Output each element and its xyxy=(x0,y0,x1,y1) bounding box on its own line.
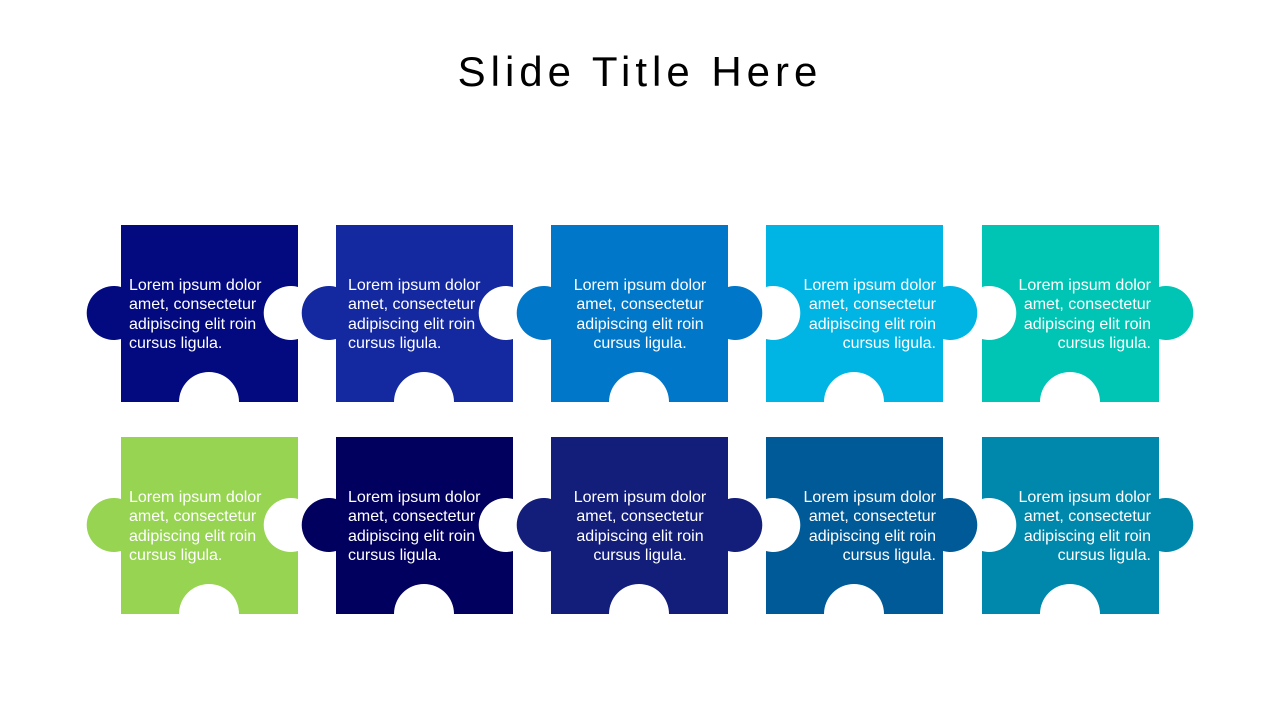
piece: row2 col2: amet, consectetur xyxy=(348,508,476,525)
piece: row2 col3: cursus ligula. xyxy=(593,547,687,564)
piece: row1 col3: adipiscing elit roin xyxy=(576,316,704,333)
piece: row2 col5: cursus ligula. xyxy=(1058,547,1151,564)
piece: row2 col4: cursus ligula. xyxy=(843,547,936,564)
piece: row1 col3: Lorem ipsum dolor xyxy=(574,277,707,294)
piece: row2 col1: adipiscing elit roin xyxy=(129,528,256,545)
piece: row2 col1: amet, consectetur xyxy=(129,508,257,525)
piece: row2 col1 xyxy=(87,437,298,614)
piece: row1 col1: amet, consectetur xyxy=(129,296,257,313)
piece: row1 col2: cursus ligula. xyxy=(348,335,441,352)
piece: row2 col2: Lorem ipsum dolor xyxy=(348,489,481,506)
piece: row2 col3: Lorem ipsum dolor xyxy=(574,489,707,506)
piece: row2 col5: adipiscing elit roin xyxy=(1024,528,1151,545)
piece: row2 col2: cursus ligula. xyxy=(348,547,441,564)
piece: row1 col4 xyxy=(766,225,977,402)
piece: row2 col3 xyxy=(517,437,762,614)
piece: row1 col1: cursus ligula. xyxy=(129,335,222,352)
piece: row1 col5: cursus ligula. xyxy=(1058,335,1151,352)
piece: row2 col4: Lorem ipsum dolor xyxy=(804,489,937,506)
piece: row2 col4: amet, consectetur xyxy=(809,508,937,525)
piece: row2 col4: adipiscing elit roin xyxy=(809,528,936,545)
piece: row1 col4: amet, consectetur xyxy=(809,296,937,313)
piece: row1 col4: adipiscing elit roin xyxy=(809,316,936,333)
piece: row1 col5: amet, consectetur xyxy=(1024,296,1152,313)
piece: row1 col1 xyxy=(87,225,298,402)
piece: row1 col3: amet, consectetur xyxy=(576,296,704,313)
piece: row2 col5: amet, consectetur xyxy=(1024,508,1152,525)
piece: row1 col5: Lorem ipsum dolor xyxy=(1018,277,1152,294)
piece: row2 col3: amet, consectetur xyxy=(576,508,704,525)
piece: row2 col5 xyxy=(982,437,1193,614)
piece: row2 col3: adipiscing elit roin xyxy=(576,528,704,545)
piece: row2 col1: cursus ligula. xyxy=(129,547,222,564)
piece: row1 col2 xyxy=(302,225,513,402)
piece: row1 col2: amet, consectetur xyxy=(348,296,476,313)
piece: row1 col1: Lorem ipsum dolor xyxy=(129,277,262,294)
piece: row1 col4: Lorem ipsum dolor xyxy=(804,277,937,294)
piece: row2 col2: adipiscing elit roin xyxy=(348,528,475,545)
piece: row1 col2: Lorem ipsum dolor xyxy=(348,277,481,294)
piece: row2 col2 xyxy=(302,437,513,614)
piece: row1 col1: adipiscing elit roin xyxy=(129,316,256,333)
piece: row1 col2: adipiscing elit roin xyxy=(348,316,475,333)
piece: row2 col4 xyxy=(766,437,977,614)
piece: row1 col5: adipiscing elit roin xyxy=(1024,316,1151,333)
piece: row1 col5 xyxy=(982,225,1193,402)
piece: row1 col3 xyxy=(517,225,762,402)
piece: row2 col1: Lorem ipsum dolor xyxy=(129,489,262,506)
piece: row1 col3: cursus ligula. xyxy=(593,335,687,352)
piece: row1 col4: cursus ligula. xyxy=(843,335,936,352)
title: Slide Title Here xyxy=(458,48,822,95)
piece: row2 col5: Lorem ipsum dolor xyxy=(1018,489,1152,506)
